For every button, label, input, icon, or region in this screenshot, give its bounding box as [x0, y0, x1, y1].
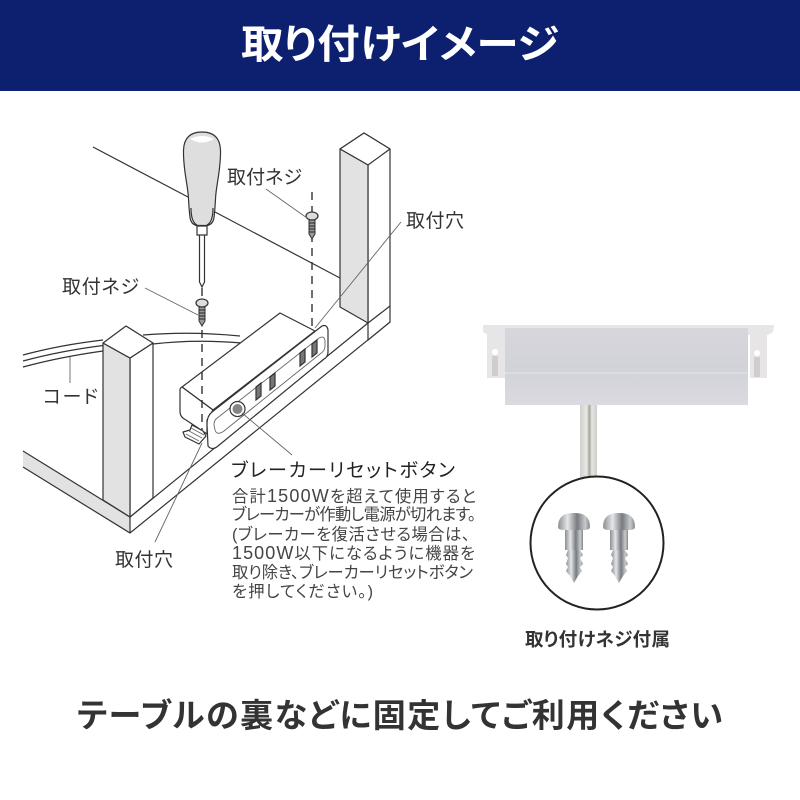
cord: [23, 333, 242, 367]
header banner: [0, 0, 800, 91]
diagram: table underside installation: [23, 132, 401, 542]
left table leg: [103, 326, 153, 517]
label: screw top: 取付ネジ: [227, 166, 302, 188]
breaker reset description: 取り除き、ブレーカーリセットボタン: [232, 563, 474, 582]
circle: included screws: [530, 476, 664, 610]
right bracket: [750, 333, 767, 378]
left bracket: [487, 333, 506, 378]
breaker reset description: [232, 486, 476, 601]
outlets: [256, 340, 317, 400]
breaker reset description: 1500W以下になるように機器を: [232, 543, 475, 563]
title: 取り付けイメージ: [241, 23, 559, 67]
breaker reset heading: ブレーカーリセットボタン: [231, 458, 455, 482]
table back edge line: [93, 147, 340, 278]
plate recess: [214, 337, 325, 433]
caption: included screws: 取り付けネジ付属: [525, 629, 670, 650]
body: [505, 328, 748, 405]
power strip: [180, 313, 328, 448]
mounting holes: [492, 349, 760, 377]
dashed guide lines: [202, 192, 312, 430]
reset button: [230, 402, 245, 416]
breaker reset description: (ブレーカーを復活させる場合は、: [232, 525, 470, 544]
mounting bracket: [183, 425, 206, 444]
front plate: [207, 326, 328, 448]
label: cord: コード: [43, 387, 98, 408]
footer message: テーブルの裏などに固定してご利用ください: [77, 697, 723, 734]
table edge: [23, 322, 390, 533]
screw photo 2: [603, 513, 635, 583]
screw photo 1: [558, 513, 590, 583]
label: screw left: 取付ネジ: [62, 276, 139, 298]
right table leg: [340, 133, 390, 340]
strip side face: [180, 387, 213, 434]
leader lines: [70, 189, 401, 542]
label: mounting hole bottom: 取付穴: [115, 549, 173, 571]
cable: [580, 404, 597, 478]
screwdriver: [183, 132, 221, 287]
label: mounting hole top: 取付穴: [406, 210, 464, 232]
seam: [505, 372, 748, 374]
breaker reset description: ブレーカーが作動し電源が切れます。: [232, 505, 476, 524]
strip top face: [182, 313, 315, 410]
screw right: [306, 212, 318, 239]
screw left: [196, 299, 208, 326]
product photo: rear view: [483, 325, 774, 478]
breaker reset description: を押してください。): [232, 583, 373, 601]
breaker reset description: 合計1500Wを超えて使用すると: [232, 486, 476, 506]
top plate: [483, 325, 774, 335]
